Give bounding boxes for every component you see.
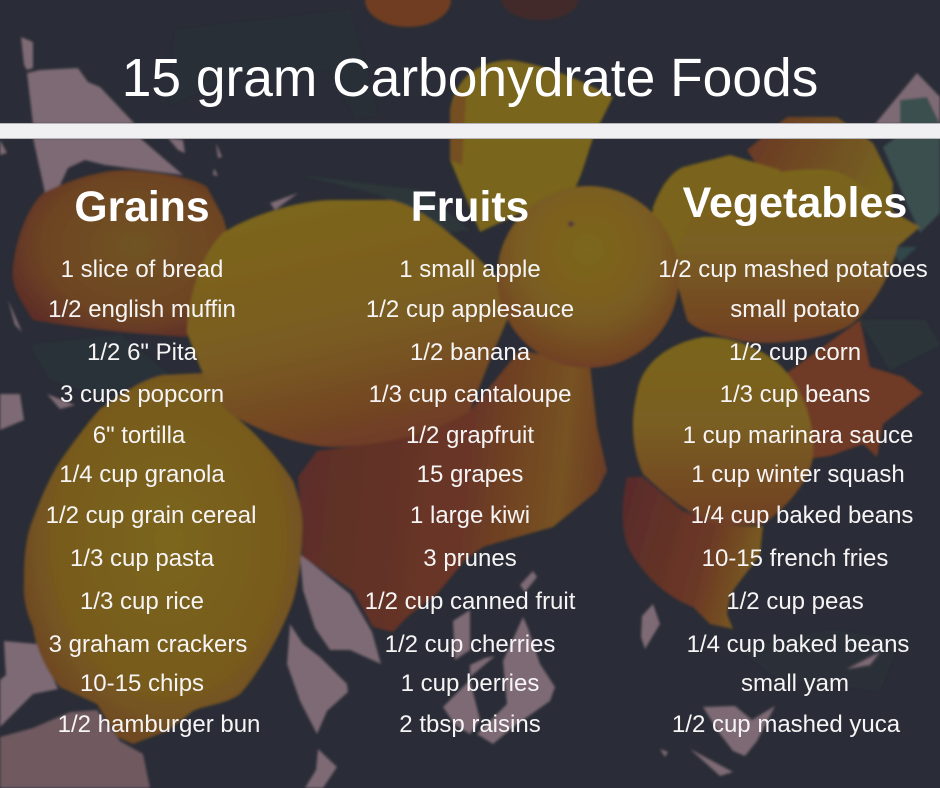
vegetables list: 1/4 cup baked beans bbox=[691, 502, 913, 529]
vegetables list: 10-15 french fries bbox=[702, 545, 888, 572]
grains list: 1/2 english muffin bbox=[48, 296, 236, 323]
fruit: left orange bbox=[12, 170, 235, 337]
fruits list: 2 tbsp raisins bbox=[399, 711, 541, 738]
grains list: 10-15 chips bbox=[80, 670, 204, 697]
fruit: lower right lemon bbox=[633, 337, 813, 526]
grains list: 6" tortilla bbox=[93, 422, 185, 449]
heading: vegetables: Vegetables bbox=[683, 179, 907, 227]
fruit: center big lemon bbox=[187, 200, 517, 447]
fruits list: 1/2 cup applesauce bbox=[366, 296, 574, 323]
fruits list: 15 grapes bbox=[417, 461, 523, 488]
fruit: big lemon bottom left bbox=[24, 373, 303, 744]
fruits list: 1 cup berries bbox=[401, 670, 539, 697]
fruits list: 1/2 cup cherries bbox=[385, 631, 555, 658]
fruits list: 1/3 cup cantaloupe bbox=[369, 381, 571, 408]
vegetables list: 1/3 cup beans bbox=[720, 381, 870, 408]
vegetables list: 1/2 cup corn bbox=[729, 339, 861, 366]
fruits list: 1/2 banana bbox=[410, 339, 530, 366]
vegetables list: 1/2 cup mashed yuca bbox=[672, 711, 900, 738]
fruit: lower right orange bbox=[787, 320, 923, 460]
grains list: 1/2 cup grain cereal bbox=[46, 502, 256, 529]
fruits list: 1/2 cup canned fruit bbox=[365, 588, 575, 615]
fruit: back yellow lemon right bbox=[650, 155, 790, 290]
vegetables list: 1 cup marinara sauce bbox=[683, 422, 913, 449]
grains list: 1/4 cup granola bbox=[59, 461, 225, 488]
fruit: front right lemon bbox=[676, 170, 920, 343]
grains list: 1/3 cup pasta bbox=[70, 545, 214, 572]
fruit: round lemon bbox=[497, 186, 679, 368]
vegetables list: 1/2 cup mashed potatoes bbox=[658, 256, 928, 283]
fruits list: 1/2 grapfruit bbox=[406, 422, 534, 449]
vegetables list: 1/2 cup peas bbox=[726, 588, 864, 615]
fruit: top orange bbox=[365, 0, 451, 27]
grains list: 1 slice of bread bbox=[61, 256, 223, 283]
fruits list: 3 prunes bbox=[423, 545, 517, 572]
title: 15 gram Carbohydrate Foods bbox=[122, 49, 818, 108]
heading: fruits: Fruits bbox=[411, 183, 529, 231]
grains list: 1/2 hamburger bun bbox=[58, 711, 260, 738]
grains list: 3 graham crackers bbox=[49, 631, 247, 658]
fruit: center lower lemon bbox=[298, 350, 607, 632]
leaf: right bbox=[883, 97, 940, 233]
vegetables list: 1/4 cup baked beans bbox=[687, 631, 909, 658]
grains list: 3 cups popcorn bbox=[60, 381, 224, 408]
vegetables list: small yam bbox=[741, 670, 849, 697]
fruit: top lemon bbox=[450, 60, 613, 232]
vegetables list: small potato bbox=[730, 296, 860, 323]
grains list: 1/2 6" Pita bbox=[87, 339, 197, 366]
fruits list: 1 large kiwi bbox=[410, 502, 530, 529]
vegetables list: 1 cup winter squash bbox=[691, 461, 905, 488]
fruits list: 1 small apple bbox=[399, 256, 541, 283]
heading: grains: Grains bbox=[74, 183, 210, 231]
fruit: lower-left hanging lemon bbox=[623, 477, 763, 629]
divider band bbox=[0, 123, 940, 139]
grains list: 1/3 cup rice bbox=[80, 588, 204, 615]
fruit: back orange lemon right bbox=[747, 117, 893, 215]
